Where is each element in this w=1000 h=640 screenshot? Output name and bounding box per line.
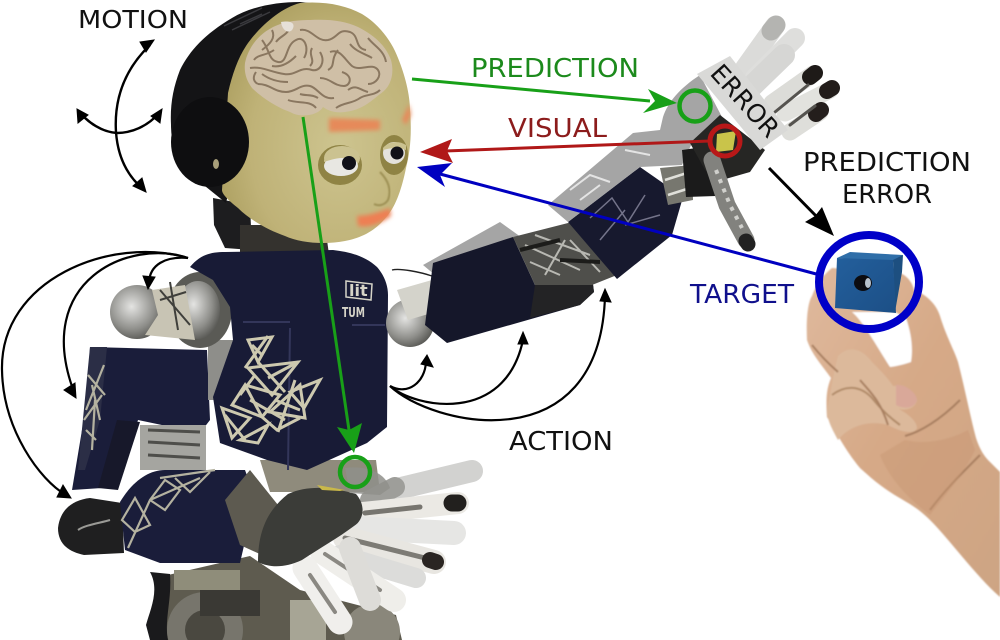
arrow: prediction to body (303, 117, 362, 453)
label: target: TARGET (689, 280, 794, 310)
base machinery (146, 556, 402, 640)
label: action: ACTION (509, 427, 613, 457)
arrow: target (417, 163, 820, 275)
robot right arm with ghost image (386, 25, 832, 347)
neck and collar (213, 198, 330, 262)
arrow: visual feedback (420, 139, 710, 163)
arrows: left arm action (2, 252, 188, 498)
translucent mid arm (513, 222, 617, 285)
grey ghost forearm and wrist (548, 75, 722, 222)
arrow: prediction (412, 79, 677, 113)
brain (245, 20, 392, 115)
robot head (171, 2, 411, 243)
dark hand (690, 115, 765, 180)
marker: red circle on hand (710, 126, 740, 156)
hand gap (852, 312, 912, 367)
grey cuff top (423, 222, 525, 275)
ear disc (171, 97, 249, 187)
black hood (171, 2, 320, 203)
shoulder chrome (110, 272, 234, 400)
elbow dark (58, 498, 124, 555)
label: prediction error: ERROR (842, 180, 932, 210)
vest triangle pattern (222, 336, 320, 443)
arrows: motion (77, 40, 162, 192)
lower hand palm (258, 488, 363, 566)
vest logo: TUM (342, 306, 365, 321)
upper arm sleeve (72, 347, 210, 490)
marker: green circle on ghost wrist (680, 90, 710, 122)
forearm sleeve (120, 470, 255, 563)
vest logo (342, 281, 372, 321)
arm chrome joint (386, 299, 434, 347)
arrows: right arm action (390, 289, 611, 420)
label: error on band: ERROR (705, 59, 785, 143)
error band (697, 56, 788, 150)
marker: blue target ring (819, 235, 919, 329)
nose highlight (374, 172, 390, 205)
label: prediction error: PREDICTION (803, 148, 971, 178)
label: prediction: PREDICTION (471, 54, 639, 84)
torso vest (190, 250, 388, 470)
robot left arm, forearm and lower hand (58, 272, 402, 640)
ghost palm (345, 467, 390, 495)
marker: green circle on body (340, 457, 370, 487)
lower waist (260, 460, 380, 492)
human hand holding the target (807, 268, 1000, 597)
target cube (835, 252, 903, 313)
curled fingers (827, 349, 917, 440)
vest logo: lit (349, 281, 368, 300)
chrome wrist joint (660, 165, 693, 205)
label: motion: MOTION (78, 5, 188, 34)
face (222, 2, 411, 243)
eyes (318, 135, 408, 185)
navy cuff (425, 237, 594, 343)
yellow patch (716, 131, 736, 152)
orange LEDs (329, 104, 411, 227)
label: prediction error (803, 148, 971, 210)
ghost fingers (745, 25, 832, 132)
navy forearm (568, 167, 683, 279)
lower hand fingers (305, 471, 472, 622)
thumb (712, 160, 746, 240)
label: visual: VISUAL (508, 114, 608, 144)
arrow: prediction error (769, 168, 834, 236)
yellow stripe (317, 485, 345, 491)
